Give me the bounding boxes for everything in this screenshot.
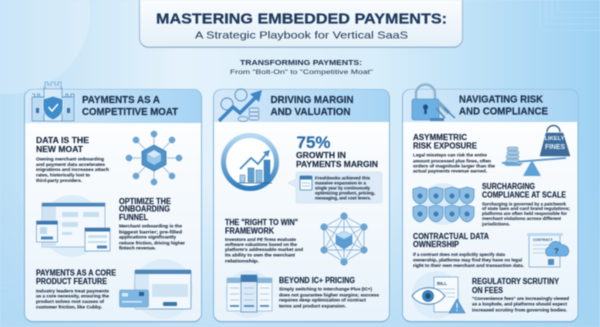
- block: beyond ic+ pricing: BEYOND IC+ PRICING: [279, 275, 355, 285]
- block: surcharging compliance: of state laws and card brand regulations;: [482, 206, 570, 212]
- title card: [140, 0, 462, 48]
- block: payments as a core product feature: customer friction, like Cubby.: [36, 305, 103, 311]
- block: optimize the onboarding funnel: Merchant onboarding is the: [119, 224, 182, 230]
- block: payments as a core product feature: Industry leaders treat payments: [36, 288, 109, 294]
- heading: [82, 94, 179, 118]
- section intro: TRANSFORMING PAYMENTS:: [240, 58, 362, 67]
- block: optimize the onboarding funnel: reduce friction, driving higher: [119, 240, 185, 246]
- block: asymmetric risk exposure: ASYMMETRIC: [413, 132, 467, 142]
- block: surcharging compliance: jurisdictions.: [481, 222, 511, 228]
- callout: freshbooks: Freshbooks achieved this: [315, 176, 370, 180]
- block: surcharging compliance: platforms are often held responsible for: [482, 211, 567, 217]
- section intro: [230, 58, 374, 76]
- icon: network framework: [321, 213, 367, 265]
- heading: PAYMENTS AS A: [82, 94, 160, 106]
- callout: freshbooks: optimizing product, pricing,: [315, 190, 375, 196]
- block: right to win: [225, 217, 303, 264]
- block: optimize the onboarding funnel: applications significantly: [119, 235, 176, 241]
- callout: freshbooks: messaging, and cost levers.: [315, 196, 371, 200]
- stat: 75 percent: PAYMENTS MARGIN: [296, 159, 378, 169]
- block: optimize the onboarding funnel: [119, 196, 185, 252]
- illustration: contract and cloud: [527, 233, 569, 267]
- illustration: scale with fines: FINES: [545, 144, 565, 151]
- block: right to win: THE "RIGHT TO WIN": [225, 217, 298, 227]
- block: payments as a core product feature: PAYMENTS AS A CORE: [36, 268, 116, 278]
- block: right to win: Investors and PE firms evaluate: [225, 237, 296, 243]
- callout: freshbooks: single year by continuously: [315, 186, 370, 190]
- illustration: onboarding forms: [36, 195, 110, 257]
- heading: DRIVING MARGIN: [270, 94, 354, 106]
- block: beyond ic+ pricing: [279, 275, 379, 309]
- block: contractual data ownership: ownership, platforms may find they have no legal: [413, 258, 523, 264]
- panel: competitive moat: [24, 82, 202, 322]
- heading: AND VALUATION: [270, 106, 350, 118]
- panel: risk and compliance: [402, 84, 578, 322]
- block: data is the new moat: [36, 135, 109, 184]
- title: MASTERING EMBEDDED PAYMENTS:: [156, 10, 447, 28]
- block: regulatory scrutiny: REGULATORY SCRUTINY: [472, 276, 559, 286]
- icon: lock and gavel: [412, 84, 455, 121]
- heading: NAVIGATING RISK: [459, 94, 543, 106]
- block: contractual data ownership: OWNERSHIP: [413, 239, 459, 249]
- illustration: bill, eye and warning: BILL: [437, 281, 447, 286]
- callout: freshbooks: massive expansion in a: [315, 180, 366, 186]
- block: beyond ic+ pricing: does not guarantee higher margins; success: [279, 292, 379, 298]
- heading: AND COMPLIANCE: [459, 106, 548, 118]
- block: right to win: its ability to own the merchant: [225, 253, 295, 259]
- block: asymmetric risk exposure: RISK EXPOSURE: [413, 140, 477, 150]
- block: surcharging compliance: COMPLIANCE AT SCALE: [482, 190, 566, 200]
- block: payments as a core product feature: [36, 268, 116, 311]
- block: data is the new moat: Owning merchant onboarding: [36, 156, 104, 162]
- block: data is the new moat: rates, historically lost to: [36, 172, 90, 178]
- heading: [270, 94, 354, 118]
- callout: freshbooks: [288, 172, 382, 203]
- block: optimize the onboarding funnel: FUNNEL: [119, 212, 148, 222]
- stat: 75 percent: 75%: [296, 134, 331, 152]
- illustration: payment window and card: [120, 259, 193, 319]
- icon: castle shield: [32, 82, 74, 121]
- stat: 75 percent: [296, 134, 378, 169]
- illustration: scale with fines: [502, 126, 570, 176]
- block: data is the new moat: NEW MOAT: [36, 144, 84, 154]
- block: surcharging compliance: [481, 181, 570, 228]
- chart: growth donut: [224, 136, 276, 188]
- block: beyond ic+ pricing: Simply switching to Interchange Plus (IC+): [279, 287, 372, 293]
- block: contractual data ownership: [413, 231, 525, 269]
- block: contractual data ownership: If a contract does not explicitly specify data: [413, 252, 505, 258]
- block: data is the new moat: and payment data accelerates: [36, 162, 105, 168]
- block: data is the new moat: DATA IS THE: [36, 135, 89, 145]
- illustration: scale with fines: LIKELY: [544, 136, 565, 142]
- panel: driving margin: [214, 89, 390, 322]
- block: regulatory scrutiny: ON FEES: [472, 285, 503, 295]
- icon: calendar: [300, 176, 312, 190]
- subtitle: A Strategic Playbook for Vertical SaaS: [195, 30, 408, 42]
- block: right to win: FRAMEWORK: [225, 226, 275, 236]
- block: surcharging compliance: SURCHARGING: [482, 181, 535, 191]
- block: asymmetric risk exposure: [413, 132, 495, 175]
- block: asymmetric risk exposure: orders of magnitude larger than the: [413, 163, 495, 169]
- block: beyond ic+ pricing: terms and product expansion.: [279, 303, 347, 309]
- block: optimize the onboarding funnel: fintech revenue.: [119, 246, 157, 252]
- block: optimize the onboarding funnel: biggest barrier; pre-filled: [119, 229, 182, 235]
- block: surcharging compliance: merchant violations across different: [482, 216, 561, 222]
- block: asymmetric risk exposure: amount processed plus fines, often: [413, 158, 491, 164]
- icon: data hub: [126, 131, 182, 185]
- block: regulatory scrutiny: increased scrutiny from governing bodies.: [472, 307, 568, 313]
- block: data is the new moat: third-party providers.: [36, 178, 83, 184]
- illustration: contract and cloud: ?: [554, 247, 559, 256]
- block: payments as a core product feature: PRODUCT FEATURE: [36, 276, 107, 286]
- block: optimize the onboarding funnel: ONBOARDING: [119, 204, 170, 214]
- block: regulatory scrutiny: "Convenience fees" are increasingly viewed: [472, 296, 569, 302]
- icons: compliance shields: [413, 183, 474, 225]
- stat: 75 percent: GROWTH IN: [296, 150, 346, 160]
- illustration: pricing table: [225, 270, 273, 318]
- illustration: bill, eye and warning: [412, 271, 465, 319]
- icon: growth arrow and coins: [219, 89, 262, 122]
- block: asymmetric risk exposure: actual payments revenue earned.: [413, 169, 488, 175]
- block: optimize the onboarding funnel: OPTIMIZE THE: [119, 196, 171, 206]
- illustration: contract and cloud: CONTRACT: [533, 238, 553, 242]
- heading: COMPETITIVE MOAT: [82, 106, 179, 118]
- block: contractual data ownership: right to their own merchant and transaction data.: [413, 263, 525, 269]
- heading: [459, 94, 548, 118]
- block: regulatory scrutiny: [472, 276, 569, 313]
- block: payments as a core product feature: product solves root causes of: [36, 299, 104, 305]
- block: asymmetric risk exposure: Legal missteps can risk the entire: [413, 153, 487, 159]
- block: data is the new moat: migrations and increases attach: [36, 167, 109, 173]
- block: surcharging compliance: Surcharging is governed by a patchwork: [482, 202, 566, 208]
- block: contractual data ownership: CONTRACTUAL DATA: [413, 231, 489, 241]
- block: right to win: software valuations based on the: [225, 242, 297, 248]
- block: right to win: relationship.: [225, 258, 260, 264]
- block: right to win: platform's addressable market and: [225, 247, 303, 253]
- section intro: From "Bolt-On" to "Competitive Moat": [230, 69, 374, 76]
- block: regulatory scrutiny: as a loophole, and platforms should expect: [472, 302, 567, 308]
- block: payments as a core product feature: as a core necessity, ensuring the: [36, 294, 109, 300]
- block: beyond ic+ pricing: requires deep optimization of contract: [279, 298, 366, 304]
